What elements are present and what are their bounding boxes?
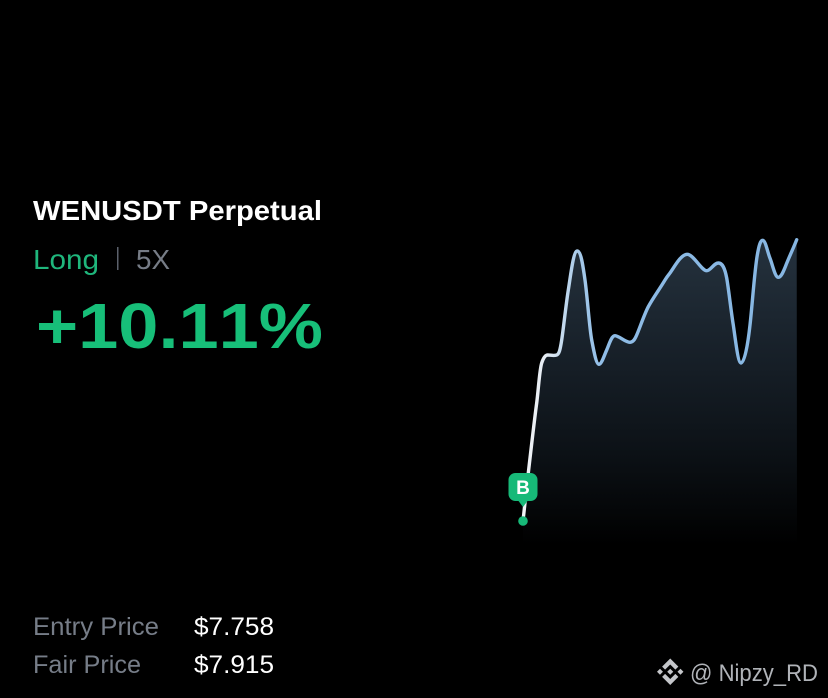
- title: WENUSDT Perpetual: [33, 195, 322, 226]
- fair price row: [33, 651, 274, 679]
- chart area fill: [523, 240, 797, 545]
- leverage: [117, 244, 170, 275]
- entry price row: $7.758: [194, 613, 274, 641]
- watermark text: @ Nipzy_RD: [690, 660, 818, 687]
- profit percentage: +10.11%: [36, 290, 323, 362]
- buy marker: B badge and entry dot: [508, 473, 538, 526]
- chart price line: [523, 240, 797, 521]
- icon: binance logo: [657, 658, 683, 685]
- position side: long: Long: [33, 244, 99, 275]
- entry price row: Entry Price: [33, 613, 159, 641]
- entry price row: [33, 613, 274, 641]
- fair price row: Fair Price: [33, 651, 141, 679]
- chart: price area and line: [523, 240, 797, 545]
- watermark: [657, 658, 818, 687]
- fair price row: $7.915: [194, 651, 274, 679]
- buy marker: B badge and entry dot: B: [516, 478, 530, 499]
- leverage: 5X: [136, 244, 170, 275]
